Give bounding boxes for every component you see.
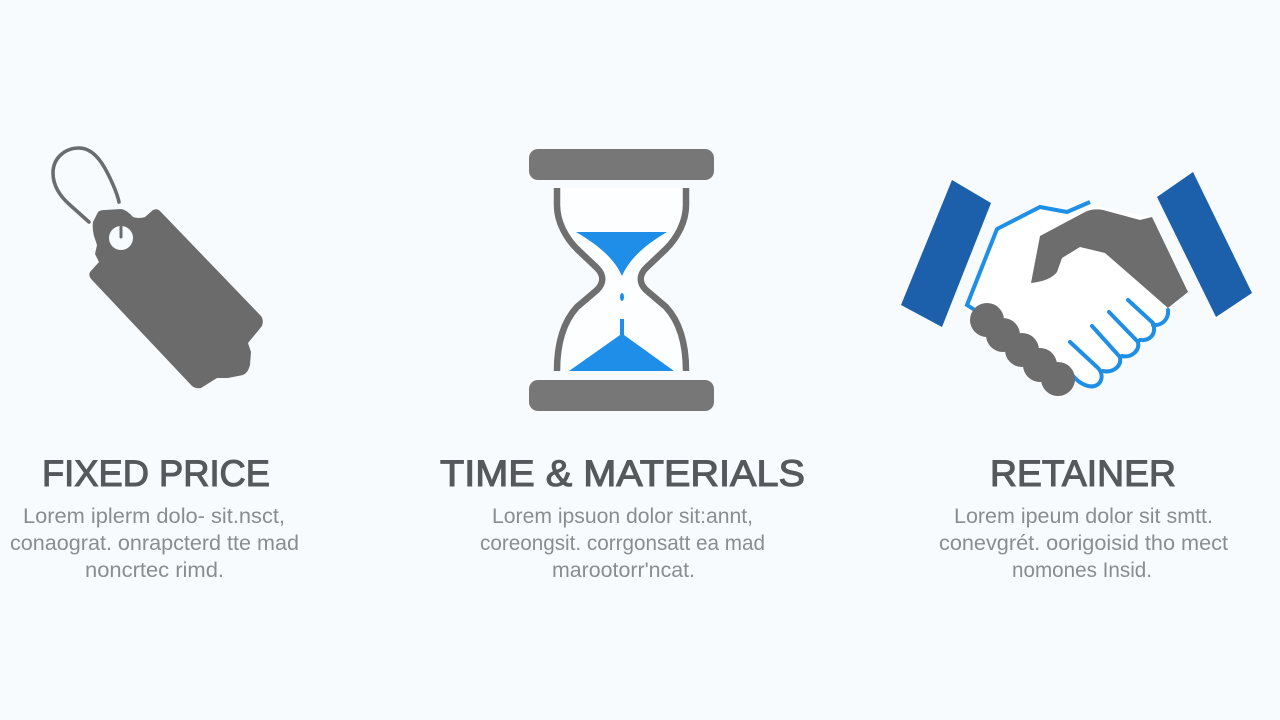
text block: retainer description: Lorem ipeum dolor sit smtt. (954, 505, 1213, 528)
icon: hourglass (529, 149, 714, 411)
heading: fixed price: FIXED PRICE (42, 453, 270, 494)
heading: retainer: RETAINER (990, 453, 1176, 494)
icon: price tag (53, 148, 263, 388)
text block: time and materials description (480, 505, 765, 582)
panel: fixed price (10, 148, 299, 582)
text block: time and materials description: marootorr'ncat. (552, 559, 695, 582)
text block: retainer description: conevgrét. oorigoisid tho mect (939, 532, 1228, 555)
icon: handshake (901, 172, 1252, 396)
panel: retainer (901, 172, 1252, 582)
text block: retainer description: nomones Insid. (1012, 559, 1152, 582)
text block: retainer description (939, 505, 1228, 582)
heading: time and materials: TIME & MATERIALS (440, 453, 805, 494)
text block: time and materials description: Lorem ipsuon dolor sit:annt, (492, 505, 753, 528)
text block: fixed price description: noncrtec rimd. (85, 559, 224, 582)
text block: fixed price description: conaograt. onrapcterd tte mad (10, 532, 299, 555)
text block: time and materials description: coreongsit. corrgonsatt ea mad (480, 532, 765, 555)
text block: fixed price description (10, 505, 299, 582)
text block: fixed price description: Lorem iplerm dolo- sit.nsct, (23, 505, 285, 528)
panel: time and materials (440, 149, 805, 582)
